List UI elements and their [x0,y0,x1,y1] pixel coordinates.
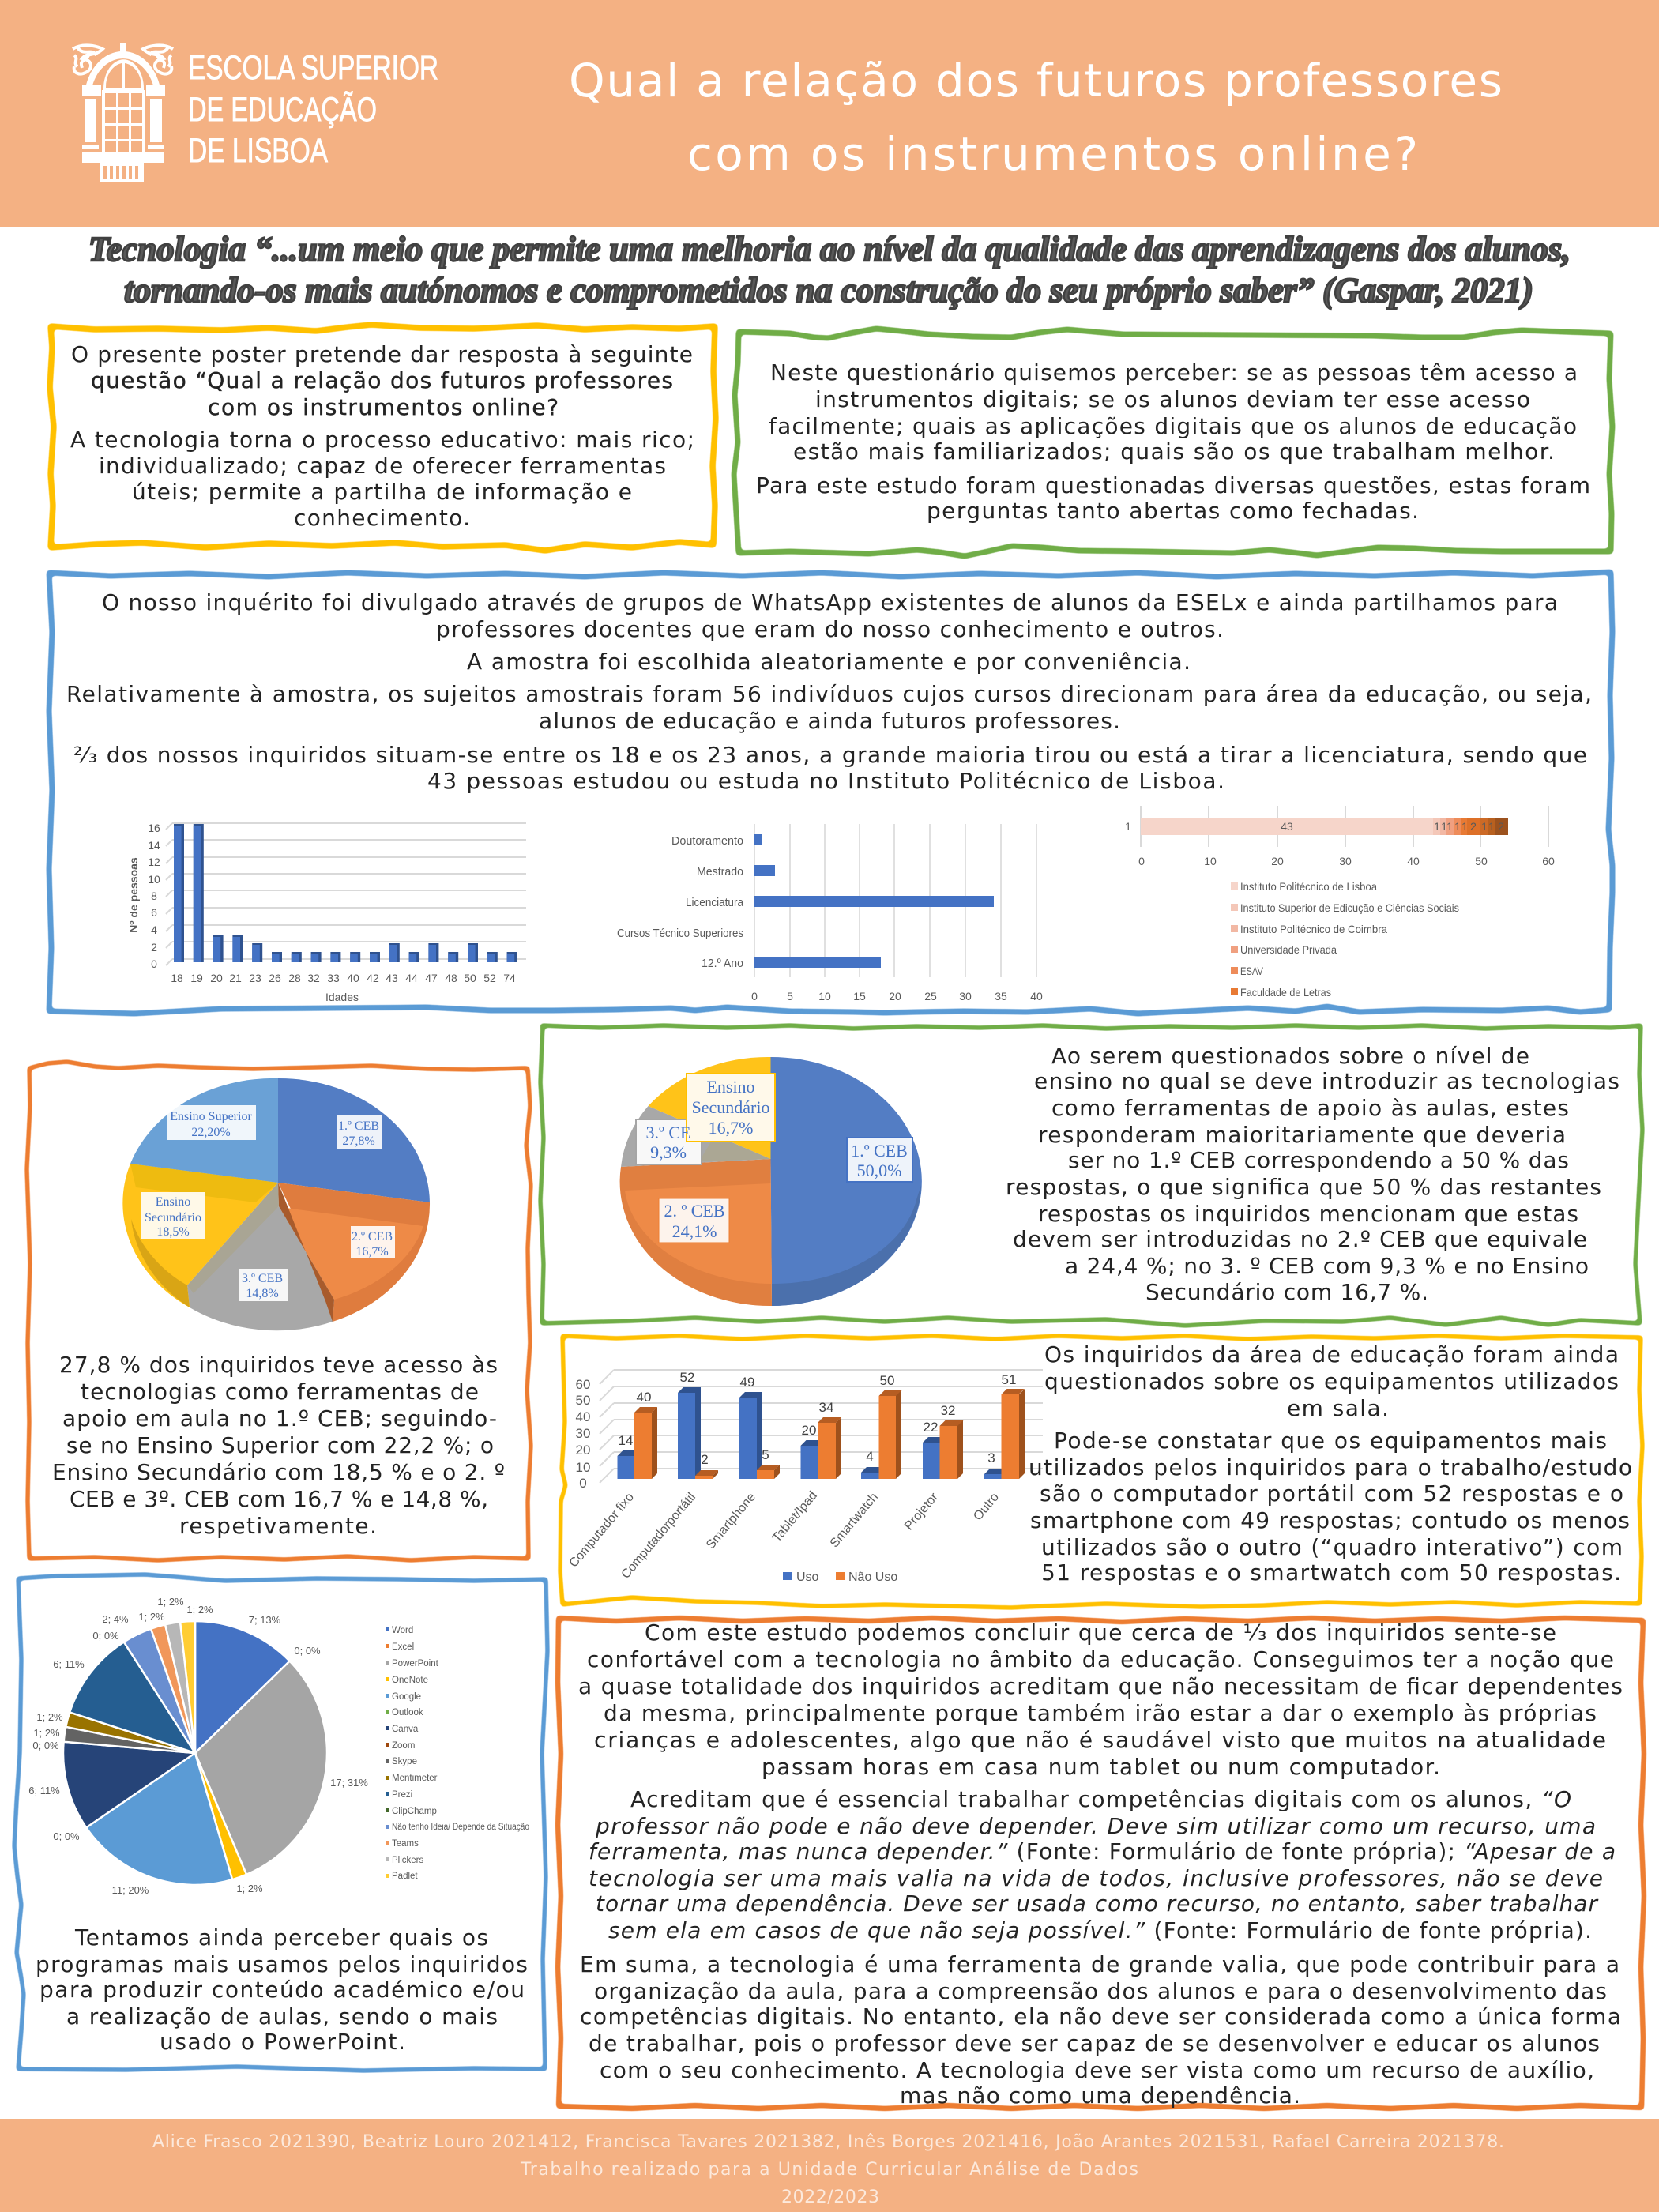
text block: equipment: utilizados pelos inquiridos para o trabalho/estudo [1029,1454,1632,1480]
text block: conclusion: Com este estudo podemos concluir que cerca de ¹⁄₃ dos inquiridos sente-se [645,1620,1556,1646]
footer credits: 2022/2023 [781,2188,879,2207]
text block: programs: para produzir conteúdo académico e/ou [40,1977,525,2003]
text block: programs: a realização de aulas, sendo o mais [66,2003,498,2030]
chart: 3D clustered bars equipment: Projetor [902,1490,941,1533]
pie data labels: 0; 0% [92,1630,119,1642]
chart: age bar chart: Idades [325,991,359,1003]
chart: age bar chart: 43 [386,972,398,984]
chart: age bar chart: 42 [367,972,379,984]
chart: 3D clustered bars equipment: 4 [866,1449,874,1464]
chart: 3D pie access level: 3.º CEB [242,1272,283,1285]
chart: 3D clustered bars equipment: 52 [680,1370,694,1385]
panel: equipment used [560,1336,1642,1608]
text block: objectives: Para este estudo foram questionadas diversas questões, estas foram [756,472,1590,498]
panel: access by teaching level [27,1062,531,1560]
chart: age bar chart: 19 [190,972,203,984]
chart: 3D clustered bars equipment: 2 [701,1452,709,1467]
chart: age bar chart: 20 [210,972,223,984]
chart: 3D pie access level: Secundário [145,1211,201,1224]
chart: 3D clustered bars equipment: 3 [988,1450,995,1465]
chart: 3D clustered bars equipment: 22 [924,1420,938,1435]
chart: 3D pie access level: Ensino [156,1195,190,1209]
legend: programs: Mentimeter [392,1774,438,1783]
legend: institutions: Instituto Politécnico de Lisboa [1240,880,1377,893]
text block: recommended level: Secundário com 16,7 %. [1146,1279,1428,1305]
chart: institutions stacked bar: 1 [1462,820,1468,833]
bars: projetor [923,1420,964,1479]
chart: education level horizontal bars: 30 [959,990,972,1003]
text block: equipment: Pode-se constatar que os equipamentos mais [1054,1428,1607,1454]
text block: sample: Relativamente à amostra, os sujeitos amostrais foram 56 indivíduos cujos cursos direcionam para área da educação, ou seja, [66,681,1592,707]
legend: programs [386,1626,529,1881]
text block: question: A tecnologia torna o processo educativo: mais rico; [70,427,694,453]
text block: access summary: tecnologias como ferramentas de [81,1379,479,1405]
text block: access summary: se no Ensino Superior com 22,2 %; o [66,1432,494,1458]
text block: conclusion: tecnologia ser uma mais valia na vida de todos, inclusive professores, não se deve [589,1865,1603,1891]
quote heading: tornando-os mais autónomos e comprometidos na construção do seu próprio saber” (Gaspar, 2021) [124,271,1533,310]
text block: objectives: facilmente; quais as aplicações digitais que os alunos de educação [769,413,1577,439]
text block: access summary: CEB e 3º. CEB com 16,7 % e 14,8 %, [70,1486,488,1512]
legend: institutions: Instituto Superior de Edicução e Ciências Sociais [1240,901,1459,914]
text block: recommended level: ensino no qual se deve introduzir as tecnologias [1034,1068,1620,1094]
text block: equipment [1029,1341,1632,1586]
chart: 3D clustered bars equipment: 40 [637,1390,651,1405]
logo wordmark: DE EDUCAÇÃO [188,91,377,129]
legend: programs: Word [392,1626,413,1635]
text block: question [70,341,694,531]
text block: sample: 43 pessoas estudou ou estuda no Instituto Politécnico de Lisboa. [427,768,1224,794]
text block: conclusion: organização da aula, para a compreensão dos alunos e para o desenvolvimento das [594,1978,1607,2004]
chart: 3D pie access level: 2.º CEB [352,1230,393,1243]
text block: conclusion: sem ela em casos de que não seja possível.” (Fonte: Formulário de fonte própria). [608,1917,1592,1943]
chart: 3D pie access level: Ensino Superior [170,1110,252,1123]
text block: conclusion: de trabalhar, pois o professor deve ser capaz de se desenvolver e educar os alunos [589,2030,1600,2056]
chart: age bar chart: 26 [269,972,281,984]
chart: age bar chart: 48 [445,972,457,984]
chart: 3D pie recommended level [620,1057,922,1306]
text block: equipment: 51 respostas e o smartwatch com 50 respostas. [1041,1559,1621,1586]
chart: 3D pie access level: 22,20% [191,1126,231,1139]
text block: conclusion: professor não pode e não deve depender. Deve sim utilizar como um recurso, uma [595,1813,1596,1839]
chart: programs pie [63,1621,327,1885]
text block: conclusion: com o seu conhecimento. A tecnologia deve ser vista como um recurso de auxílio, [600,2057,1594,2083]
legend: institutions: Universidade Privada [1240,943,1337,956]
chart: 3D clustered bars equipment: 49 [740,1375,754,1390]
chart: institutions stacked bar: 1 [1481,820,1488,833]
legend: programs: Não tenho Ideia/ Depende da Situação [392,1823,529,1832]
icon: school window logo [73,43,173,182]
legend: programs: ClipChamp [392,1807,437,1816]
chart: age bar chart: 14 [148,839,160,852]
chart: 3D pie access level: 14,8% [246,1287,279,1300]
text block: access summary: respetivamente. [179,1513,377,1539]
text block: recommended level: devem ser introduzidas no 2.º CEB que equivale [1013,1226,1587,1252]
legend: programs: Padlet [392,1872,418,1881]
chart: 3D clustered bars equipment [567,1370,1043,1584]
chart: 3D clustered bars equipment: 10 [576,1460,590,1475]
legend: uso / nao uso: Não Uso [848,1571,897,1584]
text block: recommended level [1006,1043,1620,1305]
text block: conclusion: tornar uma dependência. Deve ser usada como recurso, no entanto, saber trabalhar [596,1890,1598,1917]
text block: access summary: Ensino Secundário com 18,5 % e o 2. º [52,1459,505,1485]
quote heading [88,230,1571,310]
text block: conclusion [578,1620,1623,2109]
chart: 3D pie access level [122,1078,430,1330]
text block: objectives: instrumentos digitais; se os alunos deviam ter esse acesso [815,386,1530,412]
text block: question: conhecimento. [294,505,470,531]
logo wordmark: ESCOLA SUPERIOR [188,49,438,87]
title: com os instrumentos online? [687,127,1418,181]
text block: sample: A amostra foi escolhida aleatoriamente e por conveniência. [467,649,1191,675]
chart: 3D clustered bars equipment: Tablet/Ipad [770,1489,820,1545]
chart: 3D clustered bars equipment: Computadorportátil [619,1491,698,1582]
chart: education level horizontal bars: 0 [751,990,758,1003]
text block: recommended level: como ferramentas de apoio às aulas, estes [1051,1095,1569,1121]
chart: 3D pie recommended level: Secundário [692,1097,769,1117]
chart: age bar chart: 52 [483,972,496,984]
legend: programs: Canva [392,1725,419,1734]
footer credits [152,2132,1504,2207]
chart: age bar chart: 8 [151,890,157,902]
legend: institutions: ESAV [1240,965,1264,977]
text block: equipment: smartphone com 49 respostas; contudo os menos [1030,1507,1630,1533]
chart: 3D clustered bars equipment: 50 [880,1373,894,1388]
text block: sample: O nosso inquérito foi divulgado através de grupos de WhatsApp existentes de alunos da ESELx e ainda partilhamos para [102,589,1558,615]
legend: uso / nao uso: Uso [796,1571,819,1584]
pie data labels: 1; 2% [186,1604,213,1616]
chart: education level horizontal bars: Doutoramento [672,834,743,848]
chart: education level horizontal bars: 5 [787,990,793,1003]
text block: recommended level: a 24,4 %; no 3. º CEB com 9,3 % e no Ensino [1065,1253,1589,1279]
chart: 3D pie access level: 18,5% [156,1225,190,1239]
chart: 3D pie recommended level: 1.º CEB [851,1141,908,1161]
chart: 3D pie access level: 1.º CEB [338,1119,379,1133]
bars: smartphone [739,1392,780,1479]
text block: question: O presente poster pretende dar resposta à seguinte [71,341,693,367]
chart: 3D clustered bars equipment: 20 [802,1423,816,1438]
chart: institutions stacked bar: 43 [1281,820,1293,833]
legend: programs: Zoom [392,1741,415,1751]
text block: access summary [52,1352,505,1539]
chart: education level horizontal bars: Cursos Técnico Superiores [617,927,743,940]
chart: 3D clustered bars equipment: 32 [941,1403,955,1418]
text block: sample: ²⁄₃ dos nossos inquiridos situam-se entre os 18 e os 23 anos, a grande maioria tirou ou está a tirar a licenciatura, sendo que [73,742,1587,768]
legend: institutions: Instituto Politécnico de Coimbra [1240,923,1387,935]
legend: institutions [1231,880,1459,999]
chart: 3D clustered bars equipment: 30 [576,1426,590,1441]
footer credits: Trabalho realizado para a Unidade Curricular Análise de Dados [520,2160,1138,2180]
chart: institutions stacked bar: 1 [1488,820,1495,833]
chart: age bar chart: 4 [151,924,157,936]
text block: conclusion: mas não como uma dependência. [900,2082,1300,2109]
panel: sample description [49,572,1612,1014]
logo wordmark: DE LISBOA [188,132,328,170]
legend: programs: OneNote [392,1676,428,1685]
text block: question: úteis; permite a partilha de informação e [132,479,632,505]
text block: recommended level: ser no 1.º CEB correspondendo a 50 % das [1068,1147,1569,1173]
legend: programs: Google [392,1692,421,1702]
title [569,54,1503,181]
legend: programs: Teams [392,1839,419,1849]
chart: 3D pie access level: 27,8% [342,1134,375,1148]
chart: institutions stacked bar: 30 [1339,855,1352,867]
bars: computador portatil [678,1387,718,1479]
legend: programs: Skype [392,1757,417,1766]
text block: recommended level: respostas os inquiridos mencionam que estas [1038,1201,1578,1227]
panel: level for introducing technology [540,1025,1642,1326]
text block: conclusion: crianças e adolescentes, algo que não é saudável visto que muitos na atualidade [594,1727,1606,1753]
text block: conclusion: a quase totalidade dos inquiridos acreditam que não necessitam de ficar dependentes [578,1673,1623,1699]
chart: age bar chart: 28 [288,972,301,984]
chart: 3D clustered bars equipment: 34 [819,1400,833,1415]
pie data labels: 7; 13% [249,1614,281,1626]
chart: institutions stacked bar: 1 [1434,820,1440,833]
text block: programs: usado o PowerPoint. [160,2029,405,2055]
panel: programs used [14,1574,547,2071]
header banner [0,0,1659,227]
chart: age bar chart: 23 [249,972,261,984]
text block: question: com os instrumentos online? [208,394,559,420]
chart: institutions stacked bar: 2 [1470,820,1477,833]
chart: institutions stacked bar: 40 [1407,855,1420,867]
chart: institutions stacked bar: 20 [1271,855,1284,867]
text block: conclusion: confortável com a tecnologia no âmbito da educação. Conseguimos ter a noção que [587,1646,1614,1672]
chart: 3D clustered bars equipment: 50 [576,1393,590,1408]
chart: institutions stacked bar: 2 [1498,820,1504,833]
title: Qual a relação dos futuros professores [569,54,1503,107]
footer [0,2119,1659,2212]
pie data labels: 0; 0% [53,1830,80,1842]
chart: age bar chart: 12 [148,856,160,868]
chart: age bar chart: 0 [151,957,157,970]
chart: 3D clustered bars equipment: 0 [579,1476,587,1491]
text block: programs [36,1924,528,2055]
text block: objectives: perguntas tanto abertas como fechadas. [927,498,1419,524]
chart: institutions stacked bar: 60 [1542,855,1555,867]
chart: 3D clustered bars equipment: Computador fixo [567,1491,637,1570]
text block: objectives: estão mais familiarizados; quais são os que trabalham melhor. [793,438,1555,465]
pie data labels: 0; 0% [294,1645,321,1657]
chart: 3D pie recommended level: 3.º CE [646,1123,690,1142]
text block: recommended level: Ao serem questionados sobre o nível de [1051,1043,1529,1069]
chart: institutions stacked bar: 0 [1138,855,1145,867]
chart: institutions stacked bar: 50 [1475,855,1488,867]
logo wordmark [188,49,438,170]
quote heading: Tecnologia “...um meio que permite uma melhoria ao nível da qualidade das aprendizagens dos alunos, [88,230,1571,269]
chart: age bar chart: 2 [151,941,157,954]
panel: conclusion [558,1618,1644,2109]
pie data labels: 2; 4% [102,1613,129,1625]
text block: equipment: utilizados são o outro (“quadro interativo”) com [1041,1534,1623,1560]
legend: programs: Excel [392,1642,414,1652]
chart: 3D clustered bars equipment: 40 [576,1409,590,1424]
text block: equipment: são o computador portátil com 52 respostas e o [1040,1480,1623,1507]
chart: age bar chart: 10 [148,873,160,886]
chart: institutions stacked bar: 1 [1454,820,1461,833]
text block: sample: professores docentes que eram do nosso conhecimento e outros. [436,616,1224,642]
bars: outro [984,1389,1025,1479]
legend: uso / nao uso [783,1571,897,1584]
chart: education level horizontal bars: 12.º Ano [702,957,743,970]
chart: age bar chart: 6 [151,906,157,919]
chart: 3D pie access level: 16,7% [356,1245,389,1258]
pie data labels: 17; 31% [330,1777,368,1789]
text block: question: questão “Qual a relação dos futuros professores [91,367,673,393]
chart: education level horizontal bars: 35 [995,990,1007,1003]
panel: question and technology intro [50,325,716,551]
chart: education level horizontal bars: 40 [1030,990,1043,1003]
chart: 3D clustered bars equipment: 5 [762,1447,769,1462]
chart: age bar chart: 50 [464,972,476,984]
chart: age bar chart: 16 [148,822,160,834]
text block: programs: Tentamos ainda perceber quais os [74,1924,488,1951]
pie data labels: 1; 2% [236,1883,263,1894]
bars: computador fixo [618,1407,657,1479]
text block: conclusion: da mesma, principalmente porque também irão estar a dar o exemplo às próprias [604,1700,1597,1726]
chart: age bar chart: 74 [503,972,516,984]
pie data labels: 1; 2% [157,1596,184,1608]
chart: 3D pie recommended level: 24,1% [672,1221,717,1241]
text block: sample [66,589,1592,794]
text block: objectives [756,359,1590,524]
legend: programs: PowerPoint [392,1659,439,1668]
text block: conclusion: Acreditam que é essencial trabalhar competências digitais com os alunos, “O [630,1786,1571,1812]
chart: age bar chart: 47 [425,972,438,984]
chart: age bar chart: 40 [347,972,359,984]
chart: education level horizontal bars [617,824,1043,1003]
chart: education level horizontal bars: 15 [853,990,866,1003]
chart: 3D clustered bars equipment: 60 [576,1377,590,1392]
text block: access summary: 27,8 % dos inquiridos teve acesso às [59,1352,498,1378]
chart: education level horizontal bars: Mestrado [697,865,743,878]
chart: age bar chart: 21 [229,972,242,984]
text block: access summary: apoio em aula no 1.º CEB; seguindo- [62,1405,497,1431]
pie data labels: 11; 20% [112,1884,149,1896]
text block: conclusion: ferramenta, mas nunca depender.” (Fonte: Formulário de fonte própria); “Apesar de a [589,1838,1616,1864]
text block: equipment: questionados sobre os equipamentos utilizados [1044,1368,1619,1394]
text block: conclusion: passam horas em casa num tablet ou num computador. [762,1754,1440,1780]
bars: smartwatch [861,1390,902,1479]
text block: conclusion: competências digitais. No entanto, ela não deve ser considerada como a única forma [580,2003,1621,2030]
chart: education level horizontal bars: 10 [818,990,831,1003]
legend: programs: Outlook [392,1708,423,1717]
text block: programs: programas mais usamos pelos inquiridos [36,1951,528,1977]
panel: questionnaire objectives [734,329,1612,556]
pie data labels: 1; 2% [36,1711,63,1723]
chart: age bar chart: 44 [405,972,418,984]
text block: conclusion: Em suma, a tecnologia é uma ferramenta de grande valia, que pode contribuir para a [580,1951,1620,1977]
chart: 3D pie recommended level: 9,3% [650,1142,687,1162]
text block: equipment: em sala. [1287,1395,1389,1421]
chart: 3D pie recommended level: 50,0% [857,1161,901,1180]
chart: age bar chart: 33 [327,972,340,984]
legend: programs: Plickers [392,1856,424,1865]
chart: age bar chart: 32 [307,972,320,984]
text block: recommended level: respostas, o que significa que 50 % das restantes [1006,1174,1601,1200]
text block: equipment: Os inquiridos da área de educação foram ainda [1044,1341,1619,1367]
chart: 3D clustered bars equipment: 51 [1002,1372,1016,1387]
legend: institutions: Faculdade de Letras [1240,986,1331,999]
chart: age bar chart [127,822,526,1003]
bars: tablet [801,1417,841,1479]
text block: recommended level: responderam maioritariamente que deveria [1038,1122,1566,1148]
chart: institutions stacked bar [1125,806,1555,999]
chart: 3D pie recommended level: 2. º CEB [664,1201,725,1221]
chart: education level horizontal bars: 25 [924,990,937,1003]
pie data labels: 0; 0% [32,1740,59,1751]
chart: education level horizontal bars: 20 [889,990,901,1003]
chart: 3D clustered bars equipment: Smartphone [704,1491,758,1552]
chart: institutions stacked bar: 1 [1125,820,1131,833]
chart: age bar chart: 18 [171,972,183,984]
pie data labels: 6; 11% [53,1658,85,1670]
chart: 3D pie recommended level: 16,7% [709,1118,753,1138]
chart: 3D clustered bars equipment: 14 [619,1433,633,1448]
pie data labels: 6; 11% [28,1785,60,1796]
text block: sample: alunos de educação e ainda futuros professores. [539,708,1120,734]
pie data labels: 1; 2% [138,1611,165,1623]
chart: 3D clustered bars equipment: 20 [576,1443,590,1458]
chart: 3D pie recommended level: Ensino [706,1077,755,1097]
text block: question: individualizado; capaz de oferecer ferramentas [99,453,666,479]
chart: 3D clustered bars equipment: Smartwatch [828,1491,881,1550]
text block: objectives: Neste questionário quisemos perceber: se as pessoas têm acesso a [770,359,1578,386]
chart: institutions stacked bar: 1 [1441,820,1447,833]
footer credits: Alice Frasco 2021390, Beatriz Louro 2021412, Francisca Tavares 2021382, Inês Borges 2021416, João Arantes 2021531, Rafael Carreira 2021378. [152,2132,1504,2152]
chart: 3D clustered bars equipment: Outro [971,1491,1002,1523]
pie data labels [28,1596,368,1896]
chart: age bar chart: Nº de pessoas [127,857,140,933]
chart: institutions stacked bar: 1 [1446,820,1453,833]
pie data labels: 1; 2% [33,1727,60,1739]
chart: institutions stacked bar: 10 [1204,855,1217,867]
chart: education level horizontal bars: Licenciatura [686,896,744,909]
legend: programs: Prezi [392,1790,412,1800]
